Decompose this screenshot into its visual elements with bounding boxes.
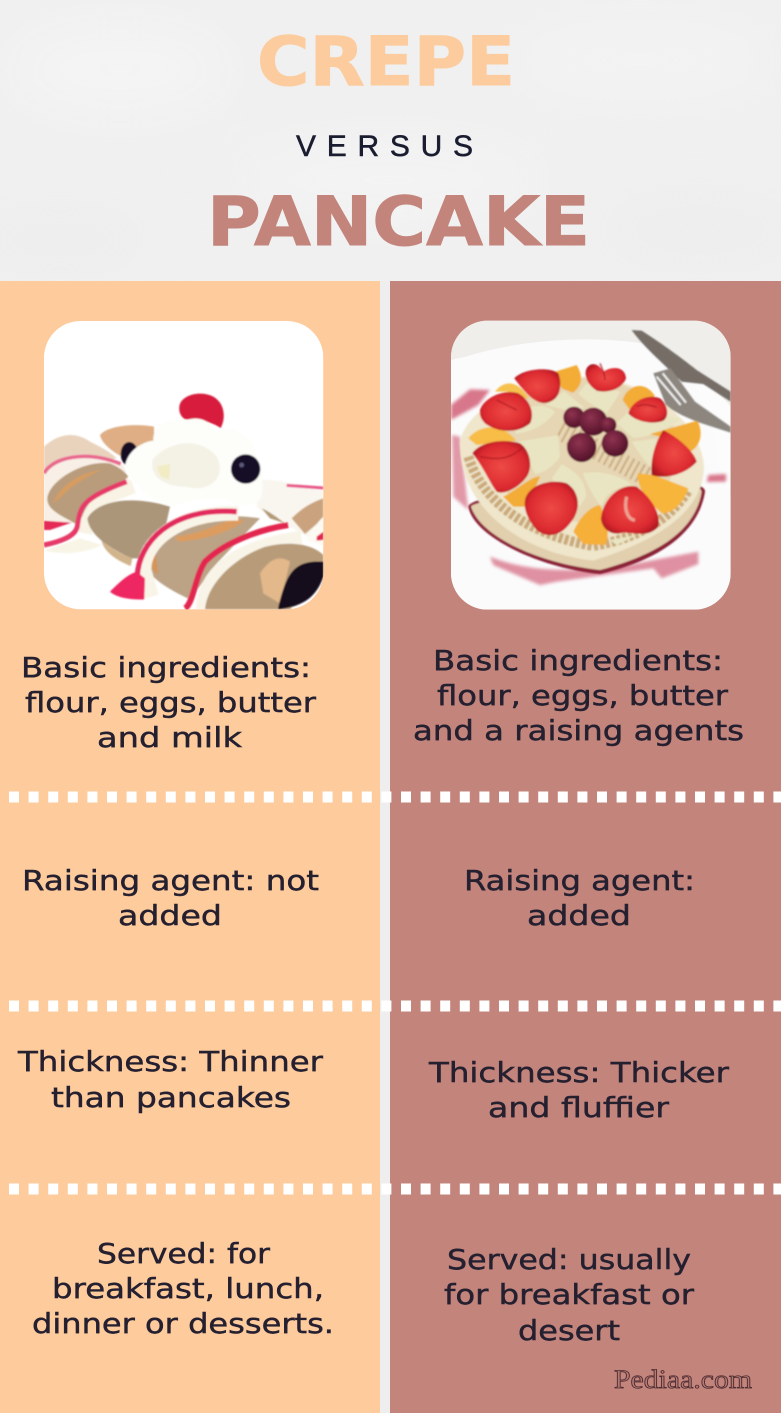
pancake: ingredients text: Basic ingredients: xyxy=(433,644,723,677)
crepe: ingredients text: flour, eggs, butter xyxy=(25,686,317,719)
orange slices xyxy=(468,365,701,545)
crepe: thickness text: Thickness: Thinner xyxy=(17,1045,324,1078)
pancake: served text: desert xyxy=(518,1314,620,1347)
table and plate xyxy=(451,321,731,610)
photo: crepes xyxy=(44,321,323,610)
panel: pancake column xyxy=(390,281,781,1413)
apple slices xyxy=(515,383,682,545)
crepe: raising agent text: added xyxy=(118,899,222,932)
header background xyxy=(0,0,781,281)
blackberries xyxy=(563,407,628,462)
left crepe xyxy=(44,454,133,553)
crepe: served text xyxy=(32,1237,334,1340)
back crepes xyxy=(44,425,323,547)
pancake: raising agent text: Raising agent: xyxy=(464,864,695,897)
panel: crepe column xyxy=(0,281,380,1413)
crepe: served text: dinner or desserts. xyxy=(32,1307,334,1340)
pancake: served text: Served: usually xyxy=(447,1243,691,1276)
knife and fork xyxy=(632,330,731,433)
crepe: ingredients text xyxy=(21,651,317,754)
dotted divider 1 xyxy=(9,792,781,802)
center crepe xyxy=(87,500,170,566)
pancake: served text: for breakfast or xyxy=(444,1278,695,1311)
title: pancake: PANCAKE xyxy=(207,183,590,262)
strawberry details xyxy=(480,363,657,520)
pancake: raising agent text: added xyxy=(527,899,631,932)
pancake: raising agent text xyxy=(464,864,695,932)
crepe: thickness text: than pancakes xyxy=(51,1081,291,1114)
pancake: thickness text xyxy=(428,1056,730,1124)
pancake stack xyxy=(460,377,705,574)
pancake: thickness text: and fluffier xyxy=(488,1091,670,1124)
front crepe xyxy=(110,511,323,610)
crepe: served text: Served: for xyxy=(97,1237,271,1270)
crepe: thickness text xyxy=(17,1045,324,1114)
subtitle: versus: VERSUS xyxy=(296,130,473,163)
pancake: ingredients text: flour, eggs, butter xyxy=(437,679,729,712)
pancake: ingredients text: and a raising agents xyxy=(413,714,744,747)
crepe: raising agent text xyxy=(22,864,319,932)
pancake: served text xyxy=(444,1243,695,1347)
photo: pancake with fruit xyxy=(451,321,731,610)
title: crepe: CREPE xyxy=(257,23,515,102)
dotted divider 2 xyxy=(9,1000,781,1012)
dotted divider 3 xyxy=(9,1184,781,1194)
strawberries xyxy=(472,364,697,535)
crepe: ingredients text: and milk xyxy=(97,721,243,754)
whipped cream and berries xyxy=(121,394,263,507)
crepe: raising agent text: Raising agent: not xyxy=(22,864,319,897)
crepe: served text: breakfast, lunch, xyxy=(52,1272,324,1305)
source credit: Pediaa.com xyxy=(614,1365,752,1394)
crepe: ingredients text: Basic ingredients: xyxy=(21,651,311,684)
pancake: ingredients text xyxy=(413,644,744,747)
pancake: thickness text: Thickness: Thicker xyxy=(428,1056,730,1089)
